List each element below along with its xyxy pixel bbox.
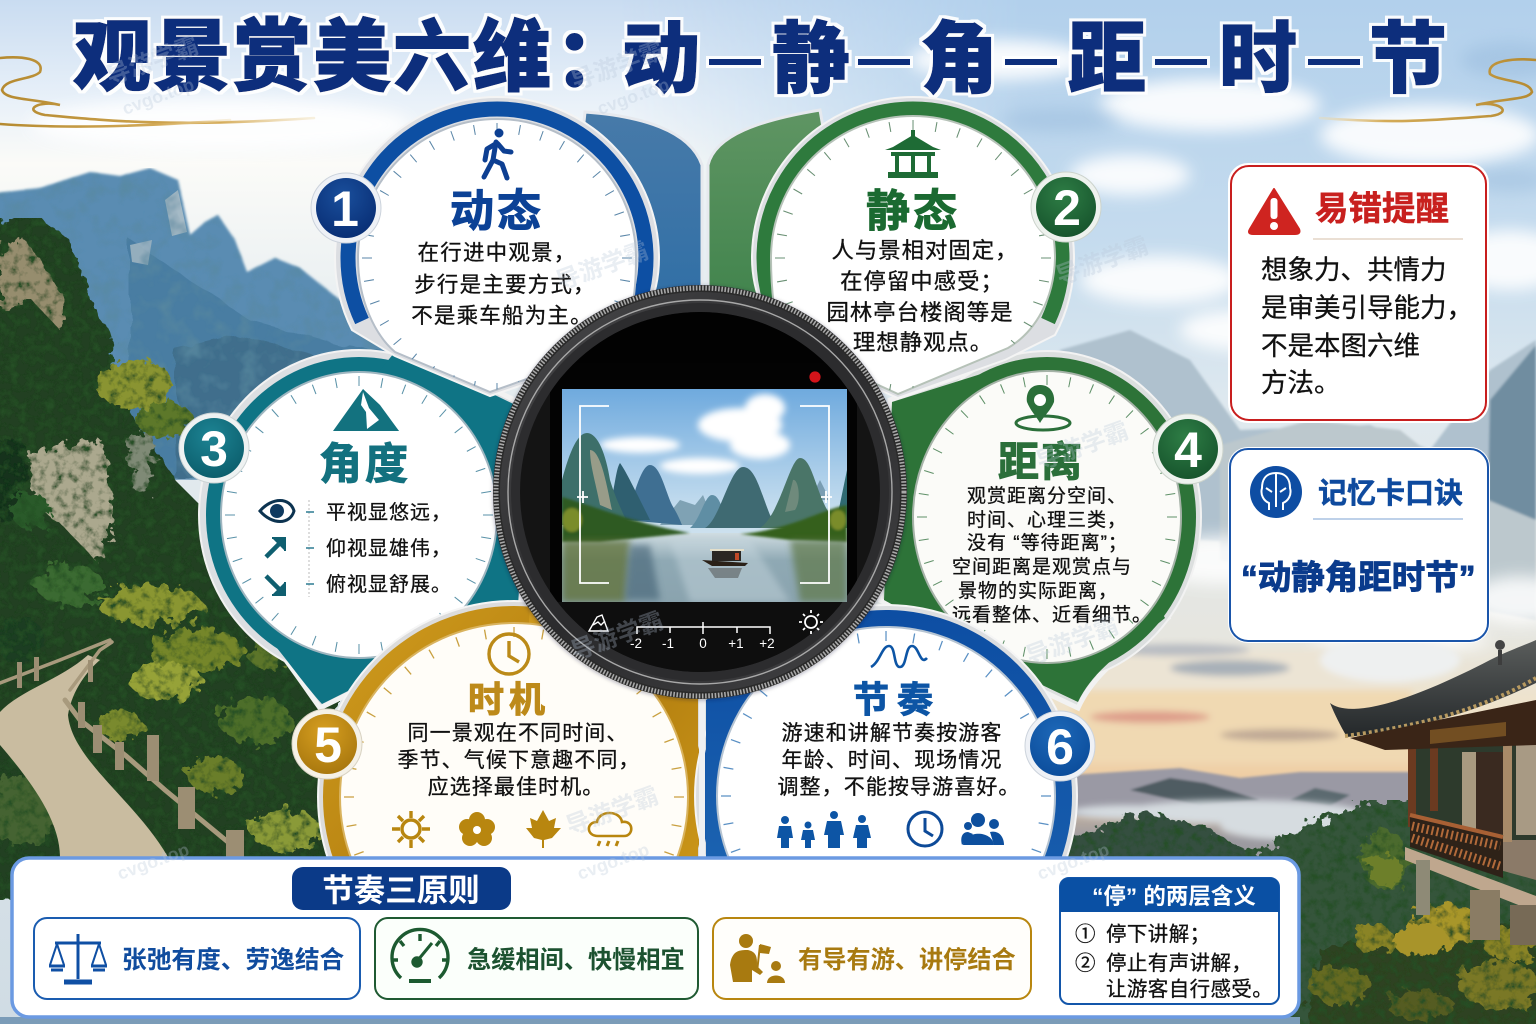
watermarks: 导游学霸 xyxy=(1053,232,1152,291)
text: distance body xyxy=(952,485,1152,626)
heading pill: 节奏三原则 xyxy=(322,872,480,908)
watermarks: 导游学霸 xyxy=(553,237,652,296)
text: stop body: 停下讲解； xyxy=(1106,923,1210,946)
frame brackets xyxy=(577,406,832,583)
panel: timing dial xyxy=(318,601,710,993)
text: static body: 理想静观点。 xyxy=(853,330,993,355)
text: angle body: 平视显悠远， xyxy=(326,501,452,524)
watermarks: 导游学霸 xyxy=(568,607,667,666)
title: 时 xyxy=(1219,0,1297,109)
text: common mistake body xyxy=(1261,255,1473,398)
text: static body: 园林亭台楼阁等是 xyxy=(826,300,1014,325)
title xyxy=(73,0,1447,109)
decorative gold swirl right xyxy=(1320,59,1536,121)
heading: dynamic: 动态 xyxy=(450,187,544,236)
icon: guide and tourist xyxy=(730,934,785,983)
text: stop body: ② xyxy=(1075,952,1096,975)
icon: arrow down xyxy=(266,576,285,595)
icon: sun xyxy=(392,811,430,848)
badge: number 3 xyxy=(179,413,249,483)
title: 动 xyxy=(622,0,700,109)
text: distance body: 没有 “等待距离”； xyxy=(967,532,1128,554)
badge: number 4: 4 xyxy=(1174,422,1202,478)
exposure scale: 0 xyxy=(699,636,707,651)
text: dynamic body: 不是乘车船为主。 xyxy=(411,304,593,328)
text: distance body: 时间、心理三类， xyxy=(967,509,1127,531)
heading: memory tip: 记忆卡口诀 xyxy=(1318,477,1463,510)
watermarks: 导游学霸 xyxy=(1033,417,1132,476)
icon: maple leaf xyxy=(526,810,561,848)
watermarks: cvgo.top xyxy=(115,839,192,884)
text: rhythm body: 调整，不能按导游喜好。 xyxy=(777,776,1021,799)
text: dynamic body: 在行进中观景， xyxy=(418,241,576,265)
text: guide: 有导有游、讲停结合 xyxy=(798,947,1016,974)
header: “停” 的两层含义 xyxy=(1092,884,1256,909)
record dot xyxy=(809,371,821,383)
text: timing body: 季节、气候下意趣不同， xyxy=(397,749,641,772)
text: common mistake body: 想象力、共情力 xyxy=(1261,255,1446,285)
watermarks: 导游学霸 xyxy=(568,37,667,96)
text: stop body: 让游客自行感受。 xyxy=(1106,978,1273,1001)
text: distance body: 景物的实际距离， xyxy=(958,580,1118,602)
text: timing body xyxy=(397,722,641,799)
text: stop body xyxy=(1075,923,1273,1001)
heading: angle: 角度 xyxy=(319,441,411,489)
badge: number 6: 6 xyxy=(1046,719,1074,775)
heading: rhythm: 节奏 xyxy=(853,679,941,720)
left far mountains xyxy=(0,168,430,480)
text: common mistake body: 是审美引导能力， xyxy=(1261,293,1473,323)
icon: walker xyxy=(484,129,511,178)
text: angle body: 仰视显雄伟， xyxy=(326,537,452,560)
icon: boat xyxy=(702,549,748,578)
header xyxy=(1060,878,1279,912)
panel backing: blue top-left wedge xyxy=(560,112,702,360)
text: distance body: 远看整体、近看细节。 xyxy=(952,604,1152,626)
heading: timing: 时机 xyxy=(468,679,550,720)
stone path and railing xyxy=(0,640,244,858)
icon: location pin xyxy=(1016,385,1070,430)
panel backing: green top-right wedge xyxy=(708,110,860,340)
panel: rhythm principles xyxy=(12,858,1299,1017)
watermarks: 导游学霸 xyxy=(1023,612,1122,671)
icon: group xyxy=(961,813,1004,845)
text: angle body xyxy=(326,501,452,596)
text: timing body: 同一景观在不同时间、 xyxy=(408,722,628,745)
watermarks: cvgo.top xyxy=(575,839,652,884)
mnemonic: “动静角距时节” xyxy=(1241,560,1476,597)
badge: number 1: 1 xyxy=(331,181,359,237)
camera lens viewfinder xyxy=(493,285,907,699)
card: memory tip xyxy=(1228,447,1490,643)
watermarks: 导游学霸 xyxy=(563,782,662,841)
badge: number 4 xyxy=(1153,414,1223,484)
title: 距 xyxy=(1068,0,1146,109)
panel: static dial xyxy=(752,97,1074,398)
heading: distance: 距离 xyxy=(998,439,1084,485)
icon: pavilion xyxy=(885,130,941,178)
text: rhythm body xyxy=(777,722,1021,799)
icon: gauge xyxy=(392,929,448,981)
panel: distance dial xyxy=(880,351,1201,708)
icon: arrow up xyxy=(266,538,285,557)
icon: wave xyxy=(871,646,927,667)
panel: rhythm dial xyxy=(695,605,1077,987)
exposure scale: +1 xyxy=(728,636,744,651)
text: rhythm body: 游速和讲解节奏按游客 xyxy=(782,722,1002,745)
icon: warning xyxy=(1249,189,1300,234)
icon: people xyxy=(777,811,871,848)
right mountains xyxy=(1060,330,1536,620)
badge: number 5 xyxy=(292,709,362,779)
badge: number 3: 3 xyxy=(200,421,228,477)
exposure scale xyxy=(630,622,775,651)
text: timing body: 应选择最佳时机。 xyxy=(428,776,604,799)
icon: scales xyxy=(49,934,107,982)
heading pill xyxy=(292,867,511,910)
heading: static: 静态 xyxy=(866,187,960,236)
watermarks xyxy=(103,32,1152,884)
card: tempo xyxy=(375,918,698,999)
text: distance body: 观赏距离分空间、 xyxy=(967,485,1127,507)
text: common mistake body: 不是本图六维 xyxy=(1261,331,1420,361)
text: common mistake body: 方法。 xyxy=(1261,368,1340,398)
text: dynamic body: 步行是主要方式， xyxy=(414,273,596,297)
icon: scene mode xyxy=(589,615,608,631)
icon: eye xyxy=(260,500,294,522)
text: tempo: 急缓相间、快慢相宜 xyxy=(467,947,685,974)
text: static body: 人与景相对固定， xyxy=(831,238,1019,263)
right sunset xyxy=(1070,638,1460,762)
text: balance: 张弛有度、劳逸结合 xyxy=(122,946,345,974)
text: static body: 在停留中感受； xyxy=(840,269,1004,294)
title: 角 xyxy=(920,0,998,109)
text: static body xyxy=(826,238,1019,355)
icon: flower xyxy=(459,812,495,846)
watermarks: 导游学霸 xyxy=(103,32,202,91)
text: angle body: 俯视显舒展。 xyxy=(326,573,452,596)
icon: sun xyxy=(799,610,823,634)
text: stop body: ① xyxy=(1075,923,1096,946)
heading: common mistake: 易错提醒 xyxy=(1315,191,1449,228)
badge: number 2: 2 xyxy=(1053,180,1081,236)
exposure scale: -2 xyxy=(630,636,642,651)
icon: clock xyxy=(489,634,529,674)
bottom strip xyxy=(0,1017,1300,1024)
title: 节 xyxy=(1369,0,1447,109)
badge: number 1 xyxy=(311,173,381,243)
card: meaning of stop xyxy=(1060,878,1279,1004)
icon: rain cloud xyxy=(589,813,631,846)
badge: number 5: 5 xyxy=(314,717,342,773)
badge: number 2 xyxy=(1031,172,1101,242)
text: rhythm body: 年龄、时间、现场情况 xyxy=(782,749,1002,772)
card: common mistake xyxy=(1228,163,1489,423)
watermarks: cvgo.top xyxy=(120,74,197,119)
exposure scale: -1 xyxy=(662,636,674,651)
text: stop body: 停止有声讲解， xyxy=(1106,952,1252,975)
title: ： xyxy=(555,0,633,109)
title: 静 xyxy=(772,0,850,109)
panel: dynamic dial xyxy=(335,97,659,396)
badge: number 6 xyxy=(1025,711,1095,781)
icon: mountain xyxy=(333,389,399,431)
icon: brain head xyxy=(1250,466,1302,518)
decorative gold swirl left xyxy=(0,57,314,127)
card: guide xyxy=(713,918,1031,999)
panel: angle dial xyxy=(199,343,535,708)
watermarks: cvgo.top xyxy=(1035,839,1112,884)
icon: clock xyxy=(908,812,942,846)
exposure scale: +2 xyxy=(759,636,775,651)
watermarks: cvgo.top xyxy=(595,74,672,119)
text: dynamic body xyxy=(411,241,596,328)
pavilion xyxy=(1330,640,1536,945)
text: distance body: 空间距离是观赏点与 xyxy=(952,556,1132,578)
screen: river landscape photo xyxy=(562,389,847,602)
card: balance xyxy=(34,918,360,999)
left cliff and forest xyxy=(0,218,340,900)
